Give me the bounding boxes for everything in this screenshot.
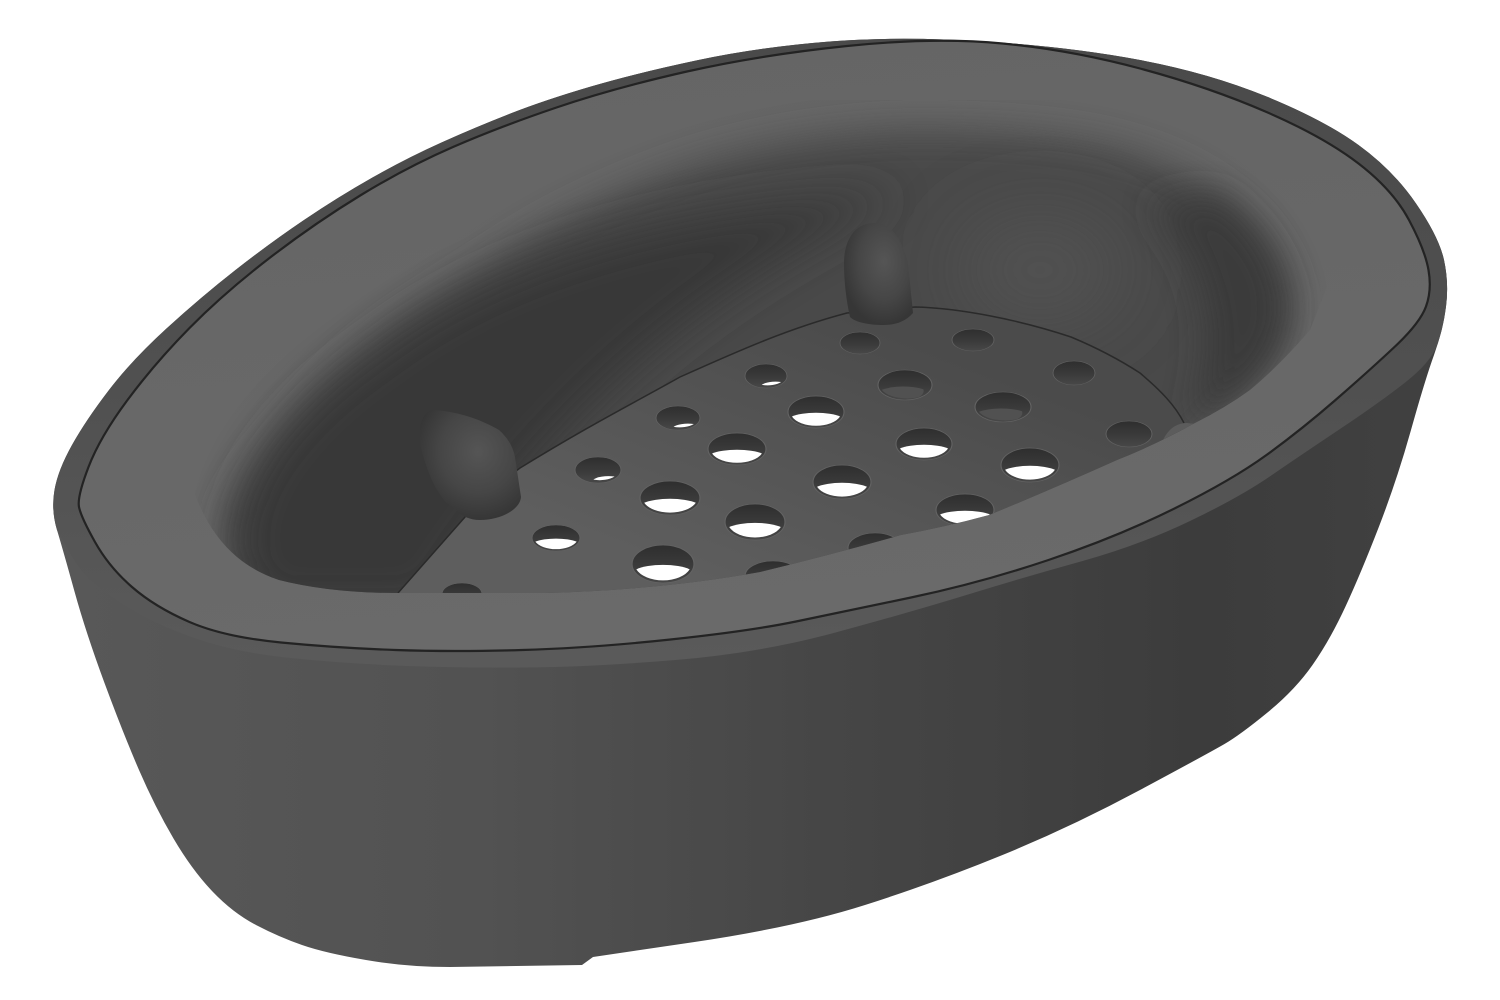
outer rim lip: [53, 39, 1447, 668]
lid top surface with groove: [79, 41, 1430, 651]
bowl right shadow: [1150, 195, 1285, 425]
bowl wall shading: [224, 130, 1292, 620]
peg: rear: [844, 223, 913, 325]
bowl rear-right highlight: [960, 220, 1120, 320]
perforated drain plate: [398, 307, 1200, 605]
drain holes: [442, 329, 1152, 605]
bowl left shadow: [220, 200, 841, 593]
hole floors seen through the rear holes: [882, 386, 1022, 420]
peg: left: [419, 410, 521, 520]
partly hidden third peg: [1164, 423, 1193, 439]
white see-through openings: [535, 382, 1055, 580]
bowl interior clipped by the front rim: [224, 130, 1292, 620]
